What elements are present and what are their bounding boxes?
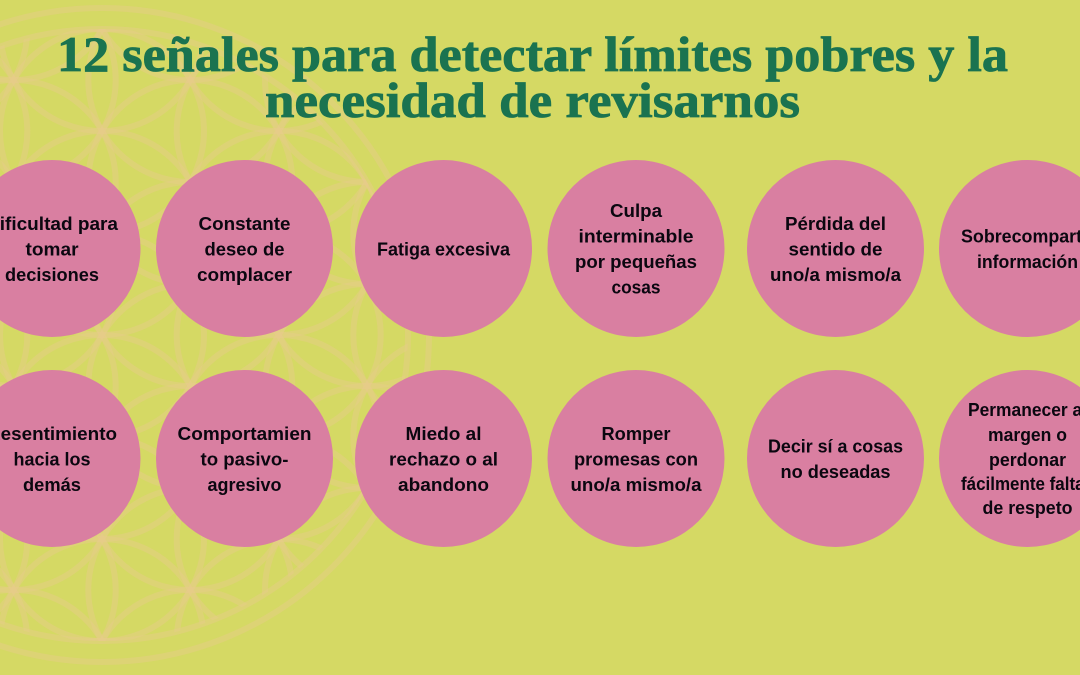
circle: Permanecer al margen o perdonar fácilmente faltas de respeto: de respeto — [982, 497, 1072, 518]
circle: Decir sí a cosas no deseadas: Decir sí a cosas — [768, 436, 903, 456]
circle: Comportamiento pasivo-agresivo: agresivo — [208, 474, 282, 495]
title — [57, 26, 1008, 128]
circle: Fatiga excesiva — [355, 160, 532, 337]
circle: Decir sí a cosas no deseadas: no deseadas — [780, 461, 890, 482]
circle: Resentimiento hacia los demás: hacia los — [14, 448, 90, 470]
circle: Culpa interminable por pequeñas cosas: por pequeñas — [575, 251, 697, 272]
circle: Permanecer al margen o perdonar fácilmente faltas de respeto: perdonar — [989, 449, 1066, 470]
circle: Resentimiento hacia los demás — [0, 370, 140, 547]
circle: Romper promesas con uno/a mismo/a: Romper — [602, 423, 670, 444]
circle: Comportamiento pasivo-agresivo — [156, 370, 333, 547]
circle: Miedo al rechazo o al abandono: Miedo al — [406, 423, 482, 444]
circle: Pérdida del sentido de uno/a mismo/a: sentido de — [788, 238, 882, 260]
circle: Dificultad para tomar decisiones: tomar — [26, 238, 78, 260]
circle: Decir sí a cosas no deseadas — [747, 370, 924, 547]
circle: Romper promesas con uno/a mismo/a: uno/a mismo/a — [570, 474, 702, 495]
circle: Miedo al rechazo o al abandono: rechazo o al — [389, 448, 498, 470]
circle: Sobrecompartir información — [939, 160, 1080, 337]
circle: Dificultad para tomar decisiones: decisiones — [5, 264, 99, 285]
circle: Resentimiento hacia los demás: demás — [23, 474, 81, 495]
circle: Pérdida del sentido de uno/a mismo/a: uno/a mismo/a — [770, 264, 902, 285]
circle: Constante deseo de complacer: Constante — [198, 213, 290, 234]
title: 12 señales para detectar límites pobres y la — [57, 26, 1008, 82]
circle: Romper promesas con uno/a mismo/a: promesas con — [574, 448, 698, 470]
circle: Constante deseo de complacer: complacer — [197, 264, 292, 285]
background: flower of life mandala — [0, 5, 432, 665]
circle: Pérdida del sentido de uno/a mismo/a: Pérdida del — [785, 213, 886, 234]
circle: Miedo al rechazo o al abandono — [355, 370, 532, 547]
circle: Fatiga excesiva: Fatiga excesiva — [377, 238, 511, 260]
circle: Permanecer al margen o perdonar fácilmente faltas de respeto: margen o — [988, 424, 1067, 445]
circle: Romper promesas con uno/a mismo/a — [548, 370, 724, 547]
circle: Comportamiento pasivo-agresivo: Comportamien — [178, 423, 312, 444]
circle: Comportamiento pasivo-agresivo: to pasivo- — [200, 448, 288, 470]
circle: Constante deseo de complacer — [156, 160, 333, 337]
title: necesidad de revisarnos — [265, 72, 800, 128]
circle: Dificultad para tomar decisiones — [0, 160, 140, 337]
circle: Miedo al rechazo o al abandono: abandono — [398, 474, 489, 495]
circle: Sobrecompartir información: información — [977, 251, 1078, 272]
circle: Culpa interminable por pequeñas cosas: interminable — [578, 226, 694, 246]
circle: Culpa interminable por pequeñas cosas — [548, 160, 724, 337]
circle: Constante deseo de complacer: deseo de — [204, 238, 284, 260]
circle: Pérdida del sentido de uno/a mismo/a — [747, 160, 924, 337]
circle: Culpa interminable por pequeñas cosas: Culpa — [610, 200, 663, 221]
circle: Permanecer al margen o perdonar fácilmente faltas de respeto — [939, 370, 1080, 547]
circle: Culpa interminable por pequeñas cosas: cosas — [612, 276, 660, 298]
